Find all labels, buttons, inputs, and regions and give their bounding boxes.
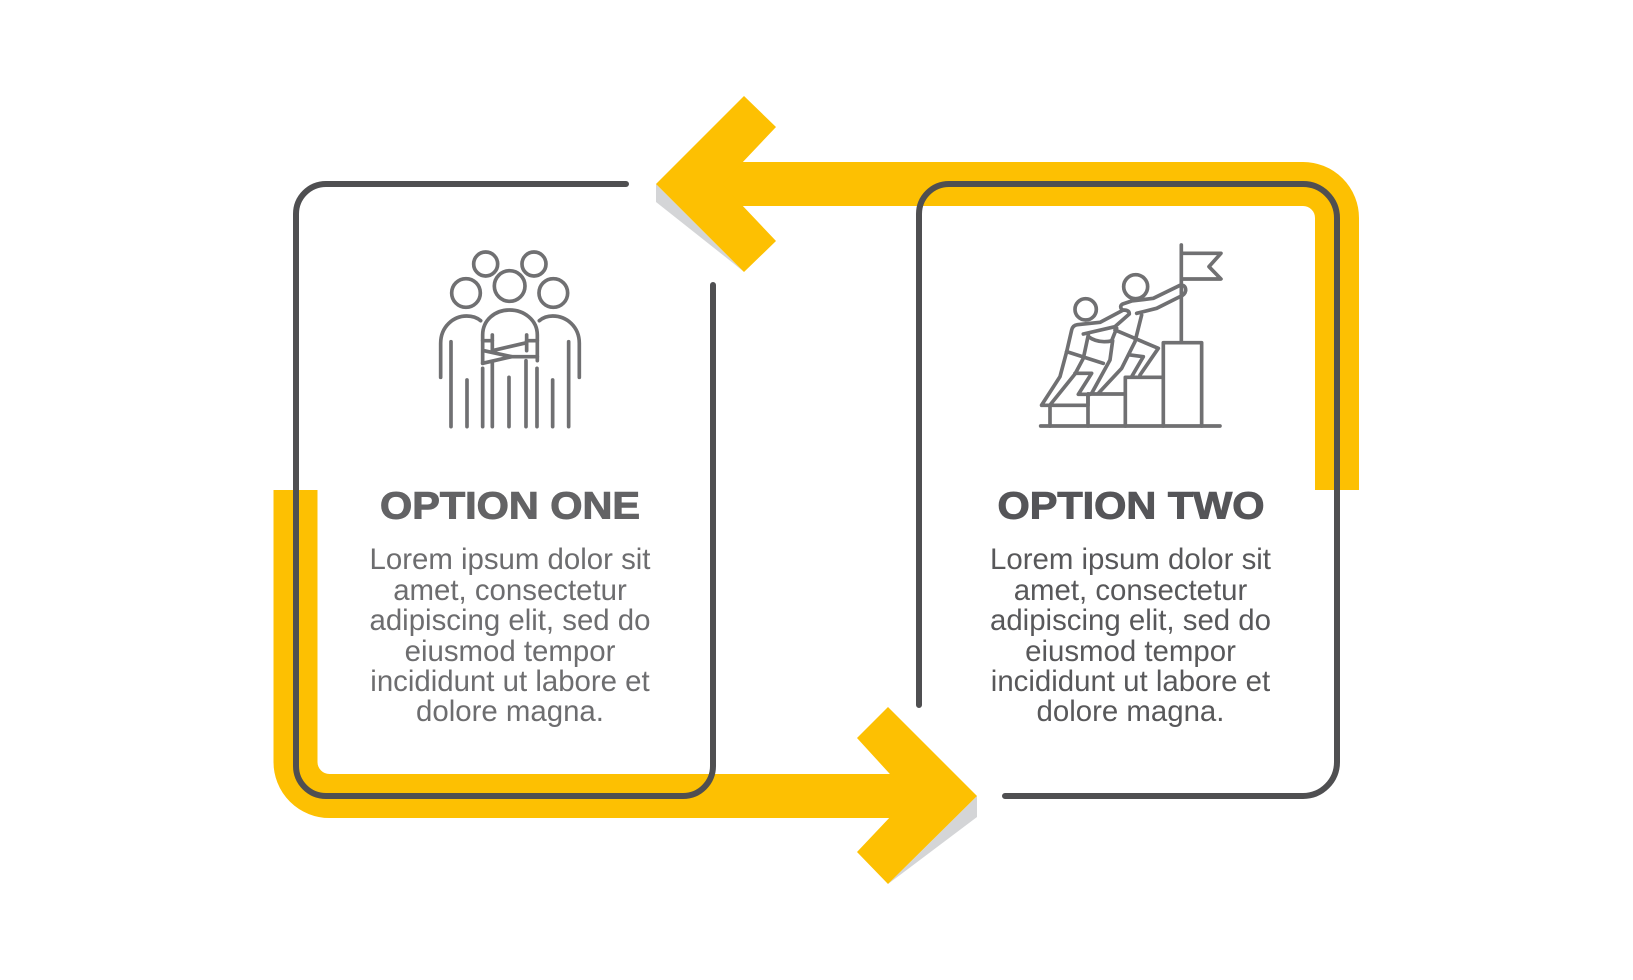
panel: option two: [919, 184, 1337, 796]
heading: option one: OPTION ONE: [380, 486, 640, 528]
text block: option two: Lorem ipsum dolor sit: [990, 543, 1271, 576]
heading: option two: OPTION TWO: [998, 486, 1264, 528]
panel frame: option one: [296, 184, 713, 796]
text block: option one: amet, consectetur: [393, 574, 627, 607]
icon: group of people: [441, 252, 579, 427]
text block: option two: dolore magna.: [1037, 695, 1224, 728]
text block: option one: [369, 543, 651, 728]
text block: option two: adipiscing elit, sed do: [990, 604, 1271, 637]
arrow: bottom yellow pointing right: [296, 490, 977, 884]
text block: option one: dolore magna.: [416, 695, 604, 728]
panel frame: option two: [919, 184, 1337, 796]
text block: option two: eiusmod tempor: [1025, 635, 1236, 668]
text block: option one: adipiscing elit, sed do: [369, 604, 651, 637]
panel: option one: [296, 184, 713, 796]
text block: option two: amet, consectetur: [1014, 574, 1248, 607]
arrow: top yellow pointing left: [656, 96, 1337, 490]
text block: option two: [990, 543, 1271, 728]
text block: option one: incididunt ut labore et: [370, 665, 650, 698]
text block: option one: Lorem ipsum dolor sit: [370, 543, 650, 576]
icon: climbers reaching a flag on steps: [1041, 245, 1221, 426]
text block: option one: eiusmod tempor: [405, 635, 616, 668]
text block: option two: incididunt ut labore et: [991, 665, 1270, 698]
